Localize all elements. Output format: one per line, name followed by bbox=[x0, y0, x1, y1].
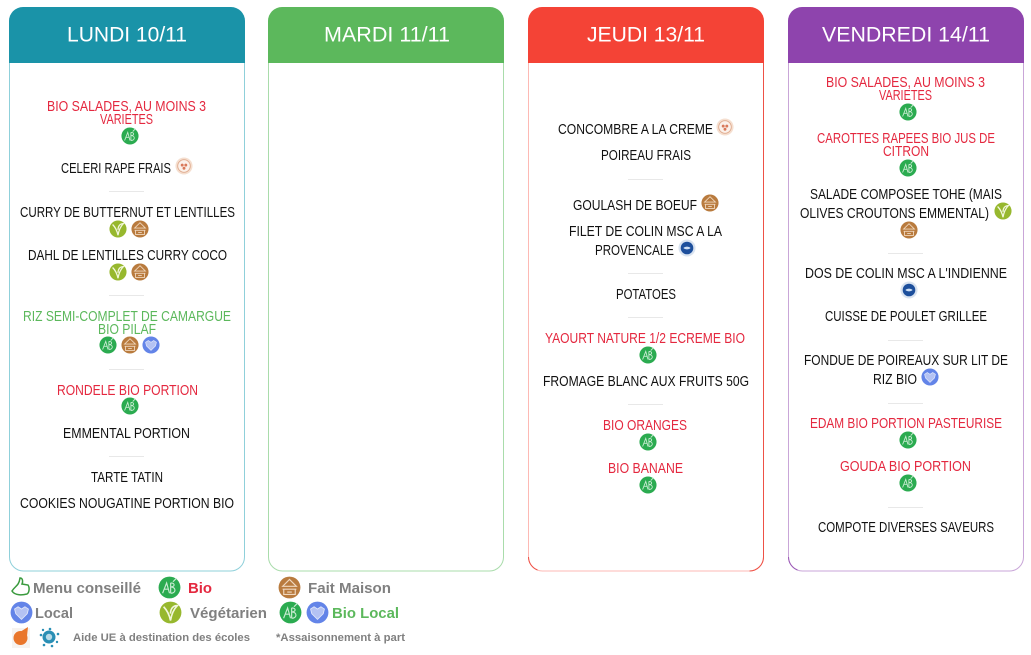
legend: bio: Bio bbox=[188, 581, 212, 597]
panel: Vendredi bbox=[788, 7, 1024, 571]
dish: cuisse: CUISSE DE POULET GRILLEE bbox=[825, 309, 987, 325]
dish: bio salades: BIO SALADES, AU MOINS 3 bbox=[47, 99, 206, 115]
dish: filet: FILET DE COLIN MSC A LA bbox=[569, 224, 722, 240]
dish: riz: RIZ SEMI-COMPLET DE CAMARGUE bbox=[23, 309, 231, 325]
heading: Vendredi: VENDREDI 14/11 bbox=[822, 24, 990, 46]
legend: menu conseillé bbox=[12, 578, 141, 597]
dish: filet: PROVENCALE bbox=[595, 243, 674, 259]
dish: yaourt bbox=[545, 331, 745, 364]
heading: Mardi: MARDI 11/11 bbox=[324, 24, 450, 46]
dish: tarte: TARTE TATIN bbox=[91, 470, 163, 486]
dish: carottes bbox=[817, 131, 995, 177]
panel: Mardi bbox=[268, 7, 504, 571]
legend: bio local bbox=[280, 602, 399, 623]
dish: fromage: FROMAGE BLANC AUX FRUITS 50G bbox=[543, 374, 749, 390]
dish: edam bbox=[810, 416, 1002, 449]
legend: bio bbox=[159, 577, 212, 598]
icon: blue EU logo bbox=[40, 628, 59, 647]
dish: celeri: CELERI RAPE FRAIS bbox=[61, 161, 171, 177]
dish: curry: CURRY DE BUTTERNUT ET LENTILLES bbox=[20, 205, 235, 221]
heading: Mardi bbox=[268, 7, 504, 63]
dish: rondele: RONDELE BIO PORTION bbox=[57, 383, 198, 399]
icon: orange EU logo bbox=[12, 627, 30, 648]
legend bbox=[11, 577, 405, 648]
dish: riz bbox=[23, 309, 231, 354]
dish: bio salades bbox=[47, 99, 206, 145]
dish: fondue bbox=[804, 353, 1008, 388]
heading: Lundi bbox=[9, 7, 245, 63]
panel: Lundi bbox=[9, 7, 245, 571]
dish: carottes: CITRON bbox=[883, 144, 929, 160]
dish: filet bbox=[569, 224, 722, 259]
dish: gouda: GOUDA BIO PORTION bbox=[840, 459, 971, 475]
legend: végétarien: Végétarien bbox=[190, 606, 267, 622]
dish: gouda bbox=[840, 459, 971, 492]
dish: yaourt: YAOURT NATURE 1/2 ECREME BIO bbox=[545, 331, 745, 347]
legend: fait maison: Fait Maison bbox=[308, 581, 391, 597]
legend: menu conseillé: Menu conseillé bbox=[33, 581, 141, 597]
dish: bio salades: VARIETES bbox=[879, 88, 932, 104]
dish: poireau: POIREAU FRAIS bbox=[601, 148, 691, 164]
heading: Lundi: LUNDI 10/11 bbox=[67, 24, 187, 46]
dish: banane bbox=[608, 461, 683, 494]
dish: bio salades: BIO SALADES, AU MOINS 3 bbox=[826, 75, 985, 91]
dish: banane: BIO BANANE bbox=[608, 461, 683, 477]
dish: salade composee bbox=[800, 187, 1012, 239]
dish: bio salades: VARIETES bbox=[100, 112, 153, 128]
dish: oranges bbox=[603, 418, 687, 451]
dish: goulash: GOULASH DE BOEUF bbox=[573, 198, 697, 214]
heading: Jeudi bbox=[528, 7, 764, 63]
heading: Jeudi: JEUDI 13/11 bbox=[587, 24, 705, 46]
legend: local: Local bbox=[35, 606, 73, 622]
panel: Jeudi bbox=[528, 7, 764, 571]
dish: cookies: COOKIES NOUGATINE PORTION BIO bbox=[20, 496, 234, 512]
dish: rondele bbox=[57, 383, 198, 415]
heading: Vendredi bbox=[788, 7, 1024, 63]
note: aide UE: Aide UE à destination des écoles bbox=[73, 632, 250, 644]
dish: curry bbox=[20, 205, 235, 238]
note: assaisonnement: *Assaisonnement à part bbox=[276, 632, 405, 644]
dish: concombre: CONCOMBRE A LA CREME bbox=[558, 122, 713, 138]
dish: potatoes: POTATOES bbox=[616, 287, 676, 303]
legend: fait maison bbox=[279, 577, 391, 598]
dish: dos de colin bbox=[805, 266, 1007, 299]
legend: local bbox=[11, 602, 73, 623]
legend: végétarien bbox=[160, 602, 267, 623]
dish: dahl: DAHL DE LENTILLES CURRY COCO bbox=[28, 248, 227, 264]
dish: oranges: BIO ORANGES bbox=[603, 418, 687, 434]
dish: riz: BIO PILAF bbox=[98, 322, 156, 338]
legend: bio local: Bio Local bbox=[332, 606, 399, 622]
dish: emmental: EMMENTAL PORTION bbox=[63, 426, 190, 442]
dish: salade composee: OLIVES CROUTONS EMMENTAL) bbox=[800, 206, 989, 222]
dish: dahl bbox=[28, 248, 227, 281]
dish: bio salades bbox=[826, 75, 985, 121]
dish: fondue: RIZ BIO bbox=[873, 372, 917, 388]
